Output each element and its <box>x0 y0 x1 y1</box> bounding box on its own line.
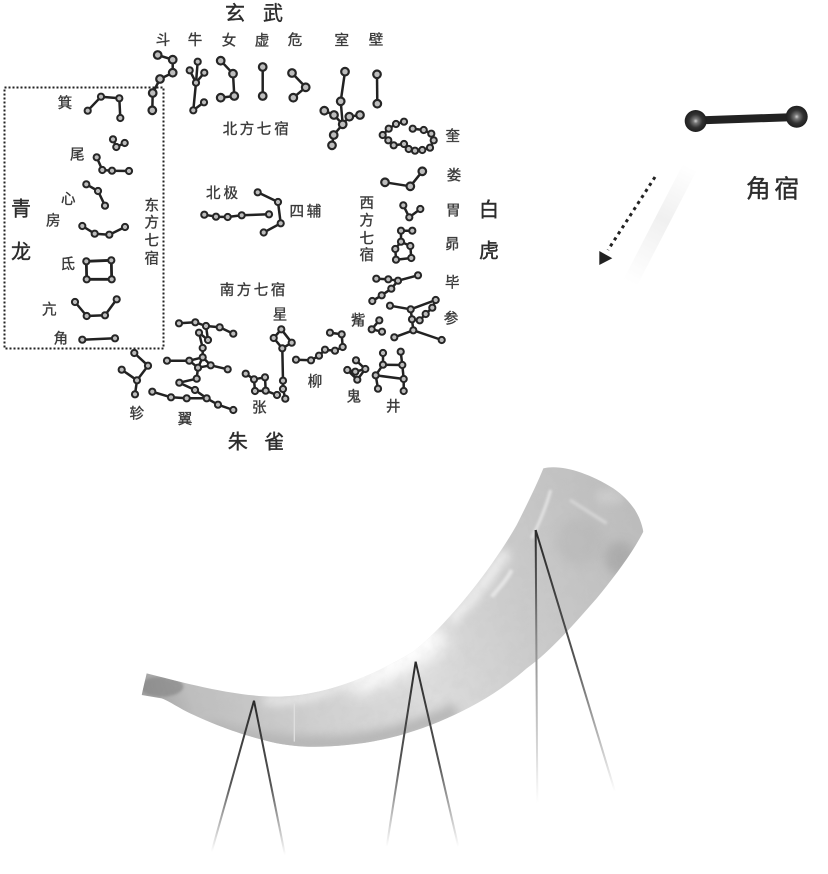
label: 井: 井 <box>386 398 401 415</box>
constellation: 氐 <box>83 257 115 282</box>
constellation: 鬼 <box>344 357 368 383</box>
diagram: 角宿 detail <box>599 106 808 283</box>
label: 箕: 箕 <box>58 95 72 112</box>
label: 胃: 胃 <box>446 204 461 220</box>
heading: 青龙 <box>11 198 31 264</box>
text: 北方七宿: 宿 <box>274 121 289 138</box>
text: 南方七宿 <box>220 282 285 299</box>
text: 西方七宿 <box>359 196 374 264</box>
label: 毕: 毕 <box>445 274 460 291</box>
constellation: 心 <box>83 181 108 209</box>
icon: 角宿 two-star constellation <box>685 106 808 132</box>
label: 尾: 尾 <box>70 147 85 163</box>
constellation: 奎 <box>380 119 437 154</box>
constellation: 斗 <box>148 51 176 114</box>
text: 北方七宿: 方 <box>240 121 254 138</box>
text: 西方七宿: 七 <box>359 230 374 247</box>
label: 柳: 柳 <box>308 373 322 390</box>
heading: 白虎: 白 <box>479 198 499 222</box>
arrow: dotted direction arrow <box>599 177 655 265</box>
label: 翼: 翼 <box>178 412 192 428</box>
text: 北方七宿: 北 <box>223 121 238 138</box>
heading: 青龙: 青 <box>11 198 31 220</box>
constellation: 四辅 <box>255 189 284 236</box>
heading: 玄武 <box>225 2 283 25</box>
text: 四辅 <box>289 203 321 220</box>
heading: 青龙: 龙 <box>11 240 31 264</box>
text: 北方七宿 <box>223 121 289 138</box>
constellation: 女 <box>217 57 238 101</box>
label: 觜: 觜 <box>351 313 366 330</box>
text: 东方七宿: 七 <box>144 233 159 250</box>
text: 西方七宿: 西 <box>359 196 374 212</box>
needle support: right <box>536 530 615 803</box>
label: 娄: 娄 <box>447 168 461 185</box>
heading: 白虎: 虎 <box>479 240 499 262</box>
text: 北方七宿: 七 <box>257 121 271 138</box>
heading: 朱雀: 朱 <box>228 430 248 454</box>
constellation: 毕 <box>369 272 421 304</box>
constellation: 觜 <box>369 317 385 335</box>
label: 心: 心 <box>61 191 76 208</box>
needle support: left <box>212 701 285 855</box>
label: 角宿 <box>746 175 799 203</box>
panel: eastern seven lodges dotted frame <box>4 88 164 348</box>
constellation: 轸 <box>119 350 151 397</box>
text: 南方七宿: 方 <box>237 282 251 299</box>
label: 虚: 虚 <box>255 32 269 50</box>
label: 参: 参 <box>444 310 458 327</box>
constellation: 牛 <box>187 59 207 113</box>
text: 南方七宿: 宿 <box>271 282 285 299</box>
horn body <box>130 455 650 755</box>
label: 亢: 亢 <box>42 301 57 319</box>
constellation: 娄 <box>381 168 426 190</box>
label: 星: 星 <box>273 308 287 324</box>
text: 南方七宿: 七 <box>254 282 268 299</box>
constellation: 尾 <box>94 136 132 174</box>
label: 昴: 昴 <box>445 237 460 253</box>
label: 室: 室 <box>334 32 349 50</box>
constellation: 亢 <box>72 296 120 319</box>
illustration: ox horn on three needles <box>130 455 650 855</box>
constellation: 参 <box>387 297 445 343</box>
constellation: 室 <box>320 68 364 149</box>
constellation: 壁 <box>373 70 381 107</box>
text: 北极 <box>206 185 238 202</box>
constellation: 胃 <box>400 202 423 220</box>
needle support: middle <box>387 662 458 847</box>
label: 鬼: 鬼 <box>346 389 361 406</box>
label: 壁: 壁 <box>369 32 383 49</box>
text: 东方七宿: 宿 <box>144 250 159 267</box>
beam: faint light trail <box>630 167 690 283</box>
text: 四辅: 辅 <box>307 203 321 220</box>
constellation: 危 <box>288 69 310 101</box>
constellation: 房 <box>79 223 128 238</box>
constellation: 星 <box>271 326 295 402</box>
label: 女: 女 <box>222 32 236 50</box>
label: 角宿: 宿 <box>774 175 799 203</box>
label: 危: 危 <box>288 32 302 49</box>
constellation: 柳 <box>293 330 346 363</box>
label: 斗: 斗 <box>156 33 170 49</box>
label: 房: 房 <box>46 213 61 230</box>
text: 北极: 极 <box>223 185 238 202</box>
constellation: 箕 <box>85 94 123 121</box>
constellation: 井 <box>373 349 407 394</box>
text: 西方七宿: 宿 <box>359 247 374 264</box>
heading: 白虎 <box>479 198 499 262</box>
label: 张: 张 <box>252 399 267 416</box>
text: 东方七宿 <box>144 198 159 267</box>
label: 轸: 轸 <box>129 405 144 422</box>
constellation: 角 <box>79 335 118 343</box>
constellation: 昴 <box>392 228 415 263</box>
label: 奎: 奎 <box>445 128 460 145</box>
heading: 朱雀: 雀 <box>264 430 284 454</box>
star map: twenty-eight lodges <box>11 2 499 454</box>
label: 角: 角 <box>53 330 68 347</box>
text: 四辅: 四 <box>289 204 304 220</box>
text: 东方七宿: 方 <box>144 214 159 231</box>
heading: 朱雀 <box>228 430 284 454</box>
heading: 玄武: 武 <box>263 2 283 25</box>
text: 西方七宿: 方 <box>359 213 374 230</box>
text: 东方七宿: 东 <box>144 198 159 215</box>
heading: 玄武: 玄 <box>225 2 245 25</box>
text: 北极: 北 <box>206 185 221 202</box>
constellation: 北极 <box>201 211 272 220</box>
constellation: 虚 <box>259 63 267 100</box>
text: 南方七宿: 南 <box>220 282 234 299</box>
label: 牛: 牛 <box>188 32 202 49</box>
constellation: 翼 <box>149 319 236 413</box>
label: 氐: 氐 <box>60 256 75 273</box>
label: 角宿: 角 <box>746 175 771 203</box>
constellation: 张 <box>243 371 280 398</box>
